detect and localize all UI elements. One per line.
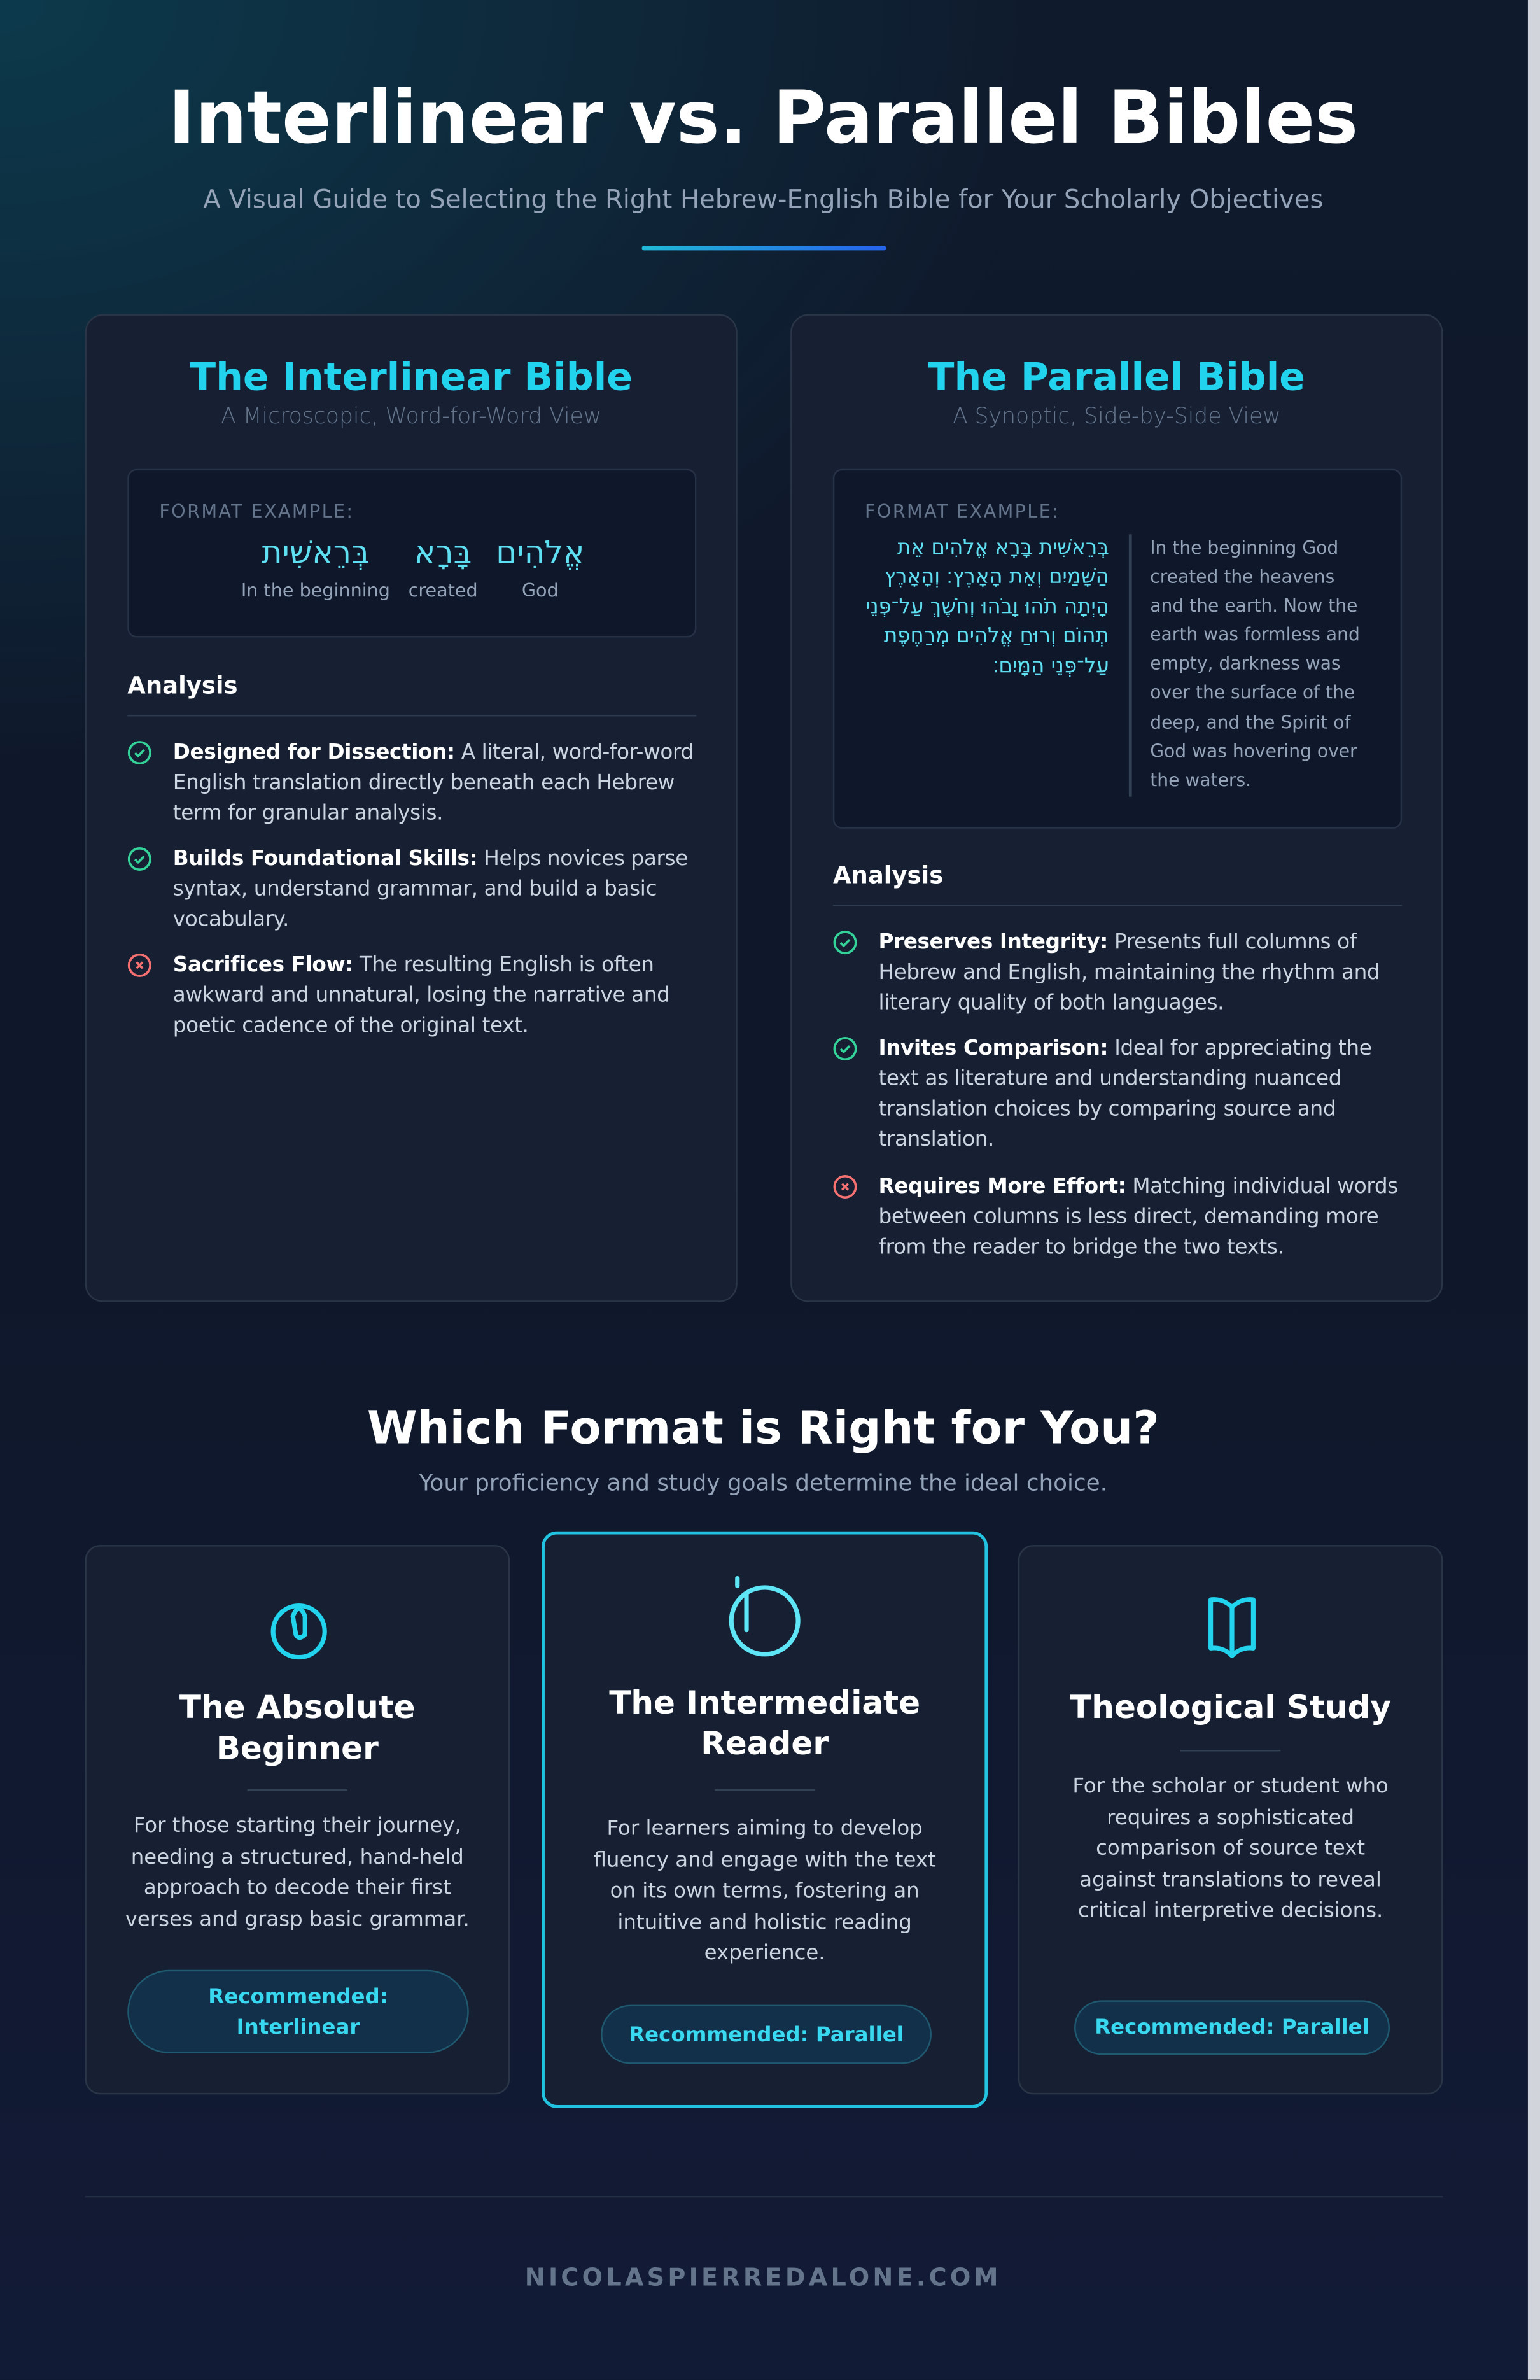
text: beginner: For those starting their journey, needing a structured, hand-held approach to decode their first verses and grasp basic grammar. — [125, 1813, 470, 1931]
bullet: dissection: term for granular analysis. — [173, 801, 443, 826]
bullet: flow: Sacrifices Flow: The resulting English is often — [173, 953, 654, 977]
subheading: A Synoptic, Side-by-Side View — [953, 405, 1281, 430]
hebrew word: in the beginning — [241, 534, 390, 601]
bullet list — [127, 741, 694, 1038]
text: theological: For the scholar or student who — [1072, 1774, 1389, 1798]
bullet: integrity — [834, 931, 1380, 1015]
hebrew word: God: God — [522, 580, 559, 601]
bullet: comparison: Invites Comparison: Ideal for appreciating the — [878, 1036, 1371, 1061]
heading: intermediate — [609, 1685, 920, 1762]
text: theological — [1072, 1774, 1389, 1923]
pill: interlinear: Recommended: — [208, 1984, 388, 2009]
icon: book — [1208, 1597, 1256, 1658]
subtitle: A Visual Guide to Selecting the Right Hebrew-English Bible for Your Scholarly Objectives — [203, 183, 1323, 214]
card: intermediate — [542, 1532, 988, 2108]
bullet: comparison: text as literature and understanding nuanced — [878, 1067, 1341, 1091]
bullet: skills: Builds Foundational Skills: Helps novices parse — [173, 847, 688, 871]
bullet: comparison: translation choices by comparing source and — [878, 1097, 1336, 1122]
footer: NICOLASPIERREDALONE.COM — [525, 2263, 1002, 2292]
hebrew word: in the beginning: בְּרֵאשִׁית — [262, 534, 370, 570]
bullet: flow: awkward and unnatural, losing the narrative and — [173, 983, 670, 1008]
analysis heading: Analysis — [833, 862, 943, 889]
hebrew word: created: created — [409, 580, 478, 601]
pill: interlinear — [127, 1970, 469, 2053]
title underline — [642, 246, 886, 250]
bullet list — [834, 931, 1398, 1260]
text: theological: against translations to reveal — [1079, 1868, 1382, 1892]
text: theological: critical interpretive decisions. — [1078, 1899, 1383, 1923]
title: Interlinear vs. Parallel Bibles — [168, 76, 1358, 161]
right page edge — [1528, 0, 1540, 2379]
bullet: integrity: literary quality of both languages. — [878, 991, 1224, 1015]
bullet: dissection: Designed for Dissection: A literal, word-for-word — [173, 741, 694, 765]
format example box — [833, 469, 1402, 829]
format example box — [127, 469, 696, 637]
icon: beginner — [271, 1603, 327, 1660]
bullet: skills — [127, 847, 688, 932]
pill: interlinear: Interlinear — [237, 2015, 360, 2039]
subheading: A Microscopic, Word-for-Word View — [221, 405, 601, 430]
bullet: effort — [834, 1174, 1398, 1260]
heading: interlinear: The Interlinear Bible — [190, 355, 633, 399]
heading: intermediate: The Intermediate — [609, 1685, 920, 1721]
text: theological: requires a sophisticated — [1107, 1805, 1354, 1829]
bullet: dissection — [127, 741, 694, 826]
bullet: effort: between columns is less direct, demanding more — [878, 1205, 1378, 1229]
hebrew column: בְּרֵאשִׁית בָּרָא אֱלֹהִים אֵת הַשָּׁמַיִם וְאֵת הָאָרֶץ׃ וְהָאָרֶץ הָיְתָה תֹהוּ וָבֹהוּ וְחֹשֶׁךְ עַל־פְּנֵי תְהוֹם וְרוּחַ אֱלֹהִים מְרַחֶפֶת עַל־פְּנֵי הַמָּיִם׃ — [865, 536, 1109, 678]
text: theological: comparison of source text — [1096, 1836, 1365, 1861]
hebrew word: in the beginning: In the beginning — [241, 580, 390, 601]
bullet: effort: Requires More Effort: Matching individual words — [878, 1174, 1398, 1199]
pill: parallel — [1074, 2000, 1390, 2055]
english column: In the beginning God created the heavens and the earth. Now the earth was formless and empty, darkness was over the surface of the deep, and the Spirit of God was hovering over the waters. — [1150, 537, 1360, 791]
bullet: comparison — [834, 1036, 1371, 1152]
bullet: integrity: Preserves Integrity: Presents full columns of — [878, 931, 1357, 955]
bullet: integrity: Hebrew and English, maintaining the rhythm and — [878, 961, 1380, 985]
bullet: comparison: translation. — [878, 1127, 994, 1152]
panel: interlinear — [85, 314, 738, 1302]
heading: intermediate: Reader — [701, 1726, 829, 1762]
hebrew word: God: אֱלֹהִים — [496, 534, 584, 570]
format example box: FORMAT EXAMPLE: — [865, 501, 1060, 522]
section heading: Which Format is Right for You? — [367, 1402, 1159, 1455]
heading: beginner: Beginner — [216, 1730, 379, 1766]
heading: beginner — [179, 1689, 416, 1766]
bullet: dissection: English translation directly beneath each Hebrew — [173, 771, 675, 795]
icon: intermediate — [729, 1576, 801, 1656]
heading: theological: Theological Study — [1070, 1689, 1391, 1726]
pill: parallel — [601, 2005, 932, 2064]
section subtitle: Your proficiency and study goals determine the ideal choice. — [419, 1469, 1107, 1496]
hebrew word: God — [496, 534, 584, 601]
heading: parallel: The Parallel Bible — [928, 355, 1305, 399]
text: intermediate: For learners aiming to develop fluency and engage with the text on its own terms, fostering an intuitive and holistic reading experience. — [593, 1817, 936, 1966]
hebrew word: created — [409, 534, 478, 601]
bullet: skills: vocabulary. — [173, 908, 289, 932]
heading: beginner: The Absolute — [179, 1689, 416, 1726]
bullet: flow — [127, 953, 670, 1038]
bullet: effort: from the reader to bridge the two texts. — [878, 1236, 1284, 1260]
card: beginner — [85, 1545, 510, 2094]
hebrew word: created: בָּרָא — [414, 534, 472, 570]
panel: parallel — [790, 314, 1443, 1302]
format example box: FORMAT EXAMPLE: — [159, 501, 354, 522]
analysis heading: Analysis — [127, 672, 238, 700]
pill: parallel: Recommended: Parallel — [1095, 2015, 1369, 2039]
pill: parallel: Recommended: Parallel — [629, 2022, 904, 2046]
card: theological — [1018, 1545, 1443, 2094]
bullet: skills: syntax, understand grammar, and build a basic — [173, 877, 657, 901]
bullet: flow: poetic cadence of the original text. — [173, 1014, 529, 1038]
